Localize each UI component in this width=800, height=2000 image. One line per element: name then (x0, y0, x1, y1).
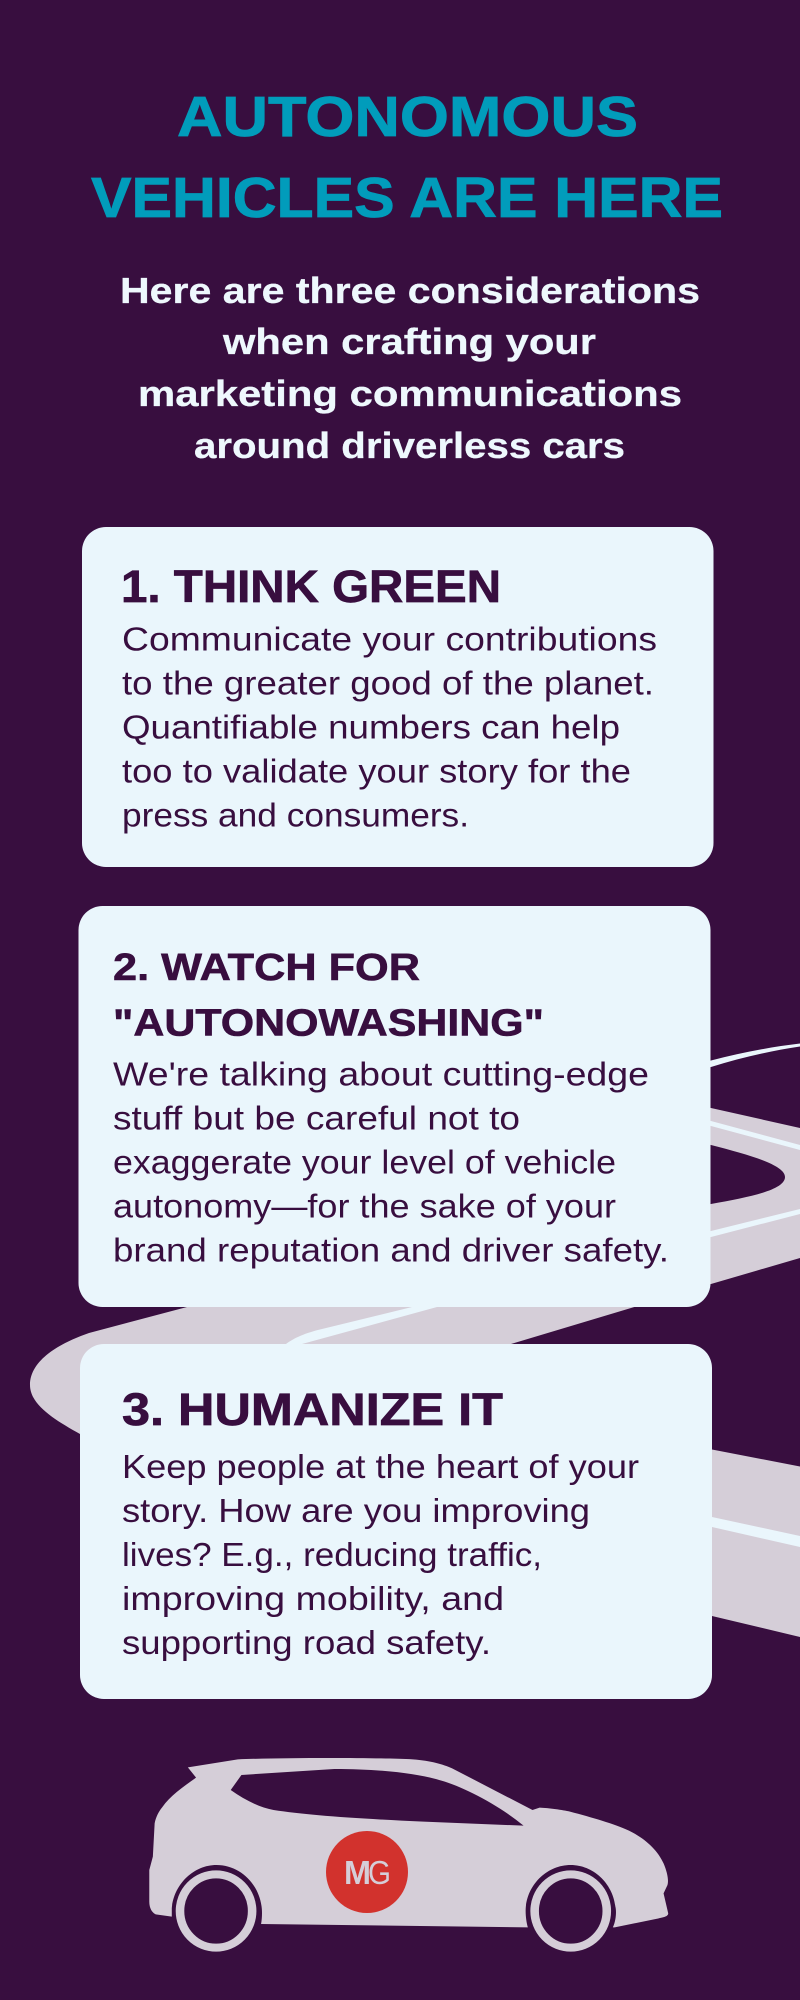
text block: watch for autonowashing: autonomy—for the sake of your (113, 1188, 616, 1224)
road lane marking: top right (700, 1044, 800, 1070)
heading: watch for autonowashing: 2. WATCH FOR (113, 947, 420, 989)
text block: humanize it (122, 1448, 639, 1661)
rear wheel (180, 1874, 252, 1948)
road surface (30, 1060, 800, 1637)
subtitle (120, 270, 700, 466)
logo badge (326, 1831, 408, 1913)
text block: humanize it: lives? E.g., reducing traffic, (122, 1536, 542, 1573)
subtitle: when crafting your (222, 321, 596, 362)
text block: watch for autonowashing: exaggerate your level of vehicle (113, 1144, 616, 1180)
text block: humanize it: improving mobility, and (122, 1580, 504, 1617)
panel: think green (82, 527, 714, 867)
road lane marking: upper strand (700, 1118, 800, 1150)
subtitle: marketing communications (138, 373, 682, 414)
heading: think green: 1. THINK GREEN (121, 561, 501, 612)
text block: watch for autonowashing: brand reputation and driver safety. (113, 1232, 669, 1268)
panel: watch for autonowashing (78, 906, 710, 1307)
text block: humanize it: Keep people at the heart of your (122, 1448, 639, 1485)
winding road illustration (30, 1044, 800, 1637)
heading: humanize it: 3. HUMANIZE IT (122, 1384, 503, 1435)
heading: watch for autonowashing (113, 947, 544, 1044)
text block: think green: to the greater good of the planet. (122, 664, 654, 702)
subtitle: around driverless cars (194, 425, 625, 466)
text block: think green: press and consumers. (122, 796, 469, 834)
car body (149, 1758, 668, 1948)
road lane marking: bottom right (700, 1514, 800, 1547)
title (91, 85, 723, 230)
road lane marking: lower strand (700, 1209, 800, 1240)
text block: think green (122, 620, 657, 834)
text block: humanize it: story. How are you improving (122, 1492, 590, 1529)
front wheel (535, 1874, 607, 1948)
panel: humanize it (80, 1344, 712, 1699)
text block: humanize it: supporting road safety. (122, 1624, 491, 1661)
heading: watch for autonowashing: "AUTONOWASHING" (113, 1002, 544, 1044)
text block: watch for autonowashing: We're talking about cutting-edge (113, 1056, 649, 1092)
text block: think green: Communicate your contributions (122, 620, 657, 658)
icon: car silhouette with logo (149, 1758, 668, 1948)
text block: watch for autonowashing (113, 1056, 669, 1268)
text block: watch for autonowashing: stuff but be careful not to (113, 1100, 520, 1136)
text block: think green: too to validate your story for the (122, 752, 631, 790)
title: AUTONOMOUS (177, 85, 638, 149)
text block: think green: Quantifiable numbers can help (122, 708, 620, 746)
logo badge: M (344, 1855, 371, 1892)
road lane marking: between cards (286, 1307, 437, 1344)
subtitle: Here are three considerations (120, 270, 700, 311)
title: VEHICLES ARE HERE (91, 166, 723, 230)
logo badge: G (368, 1855, 391, 1892)
